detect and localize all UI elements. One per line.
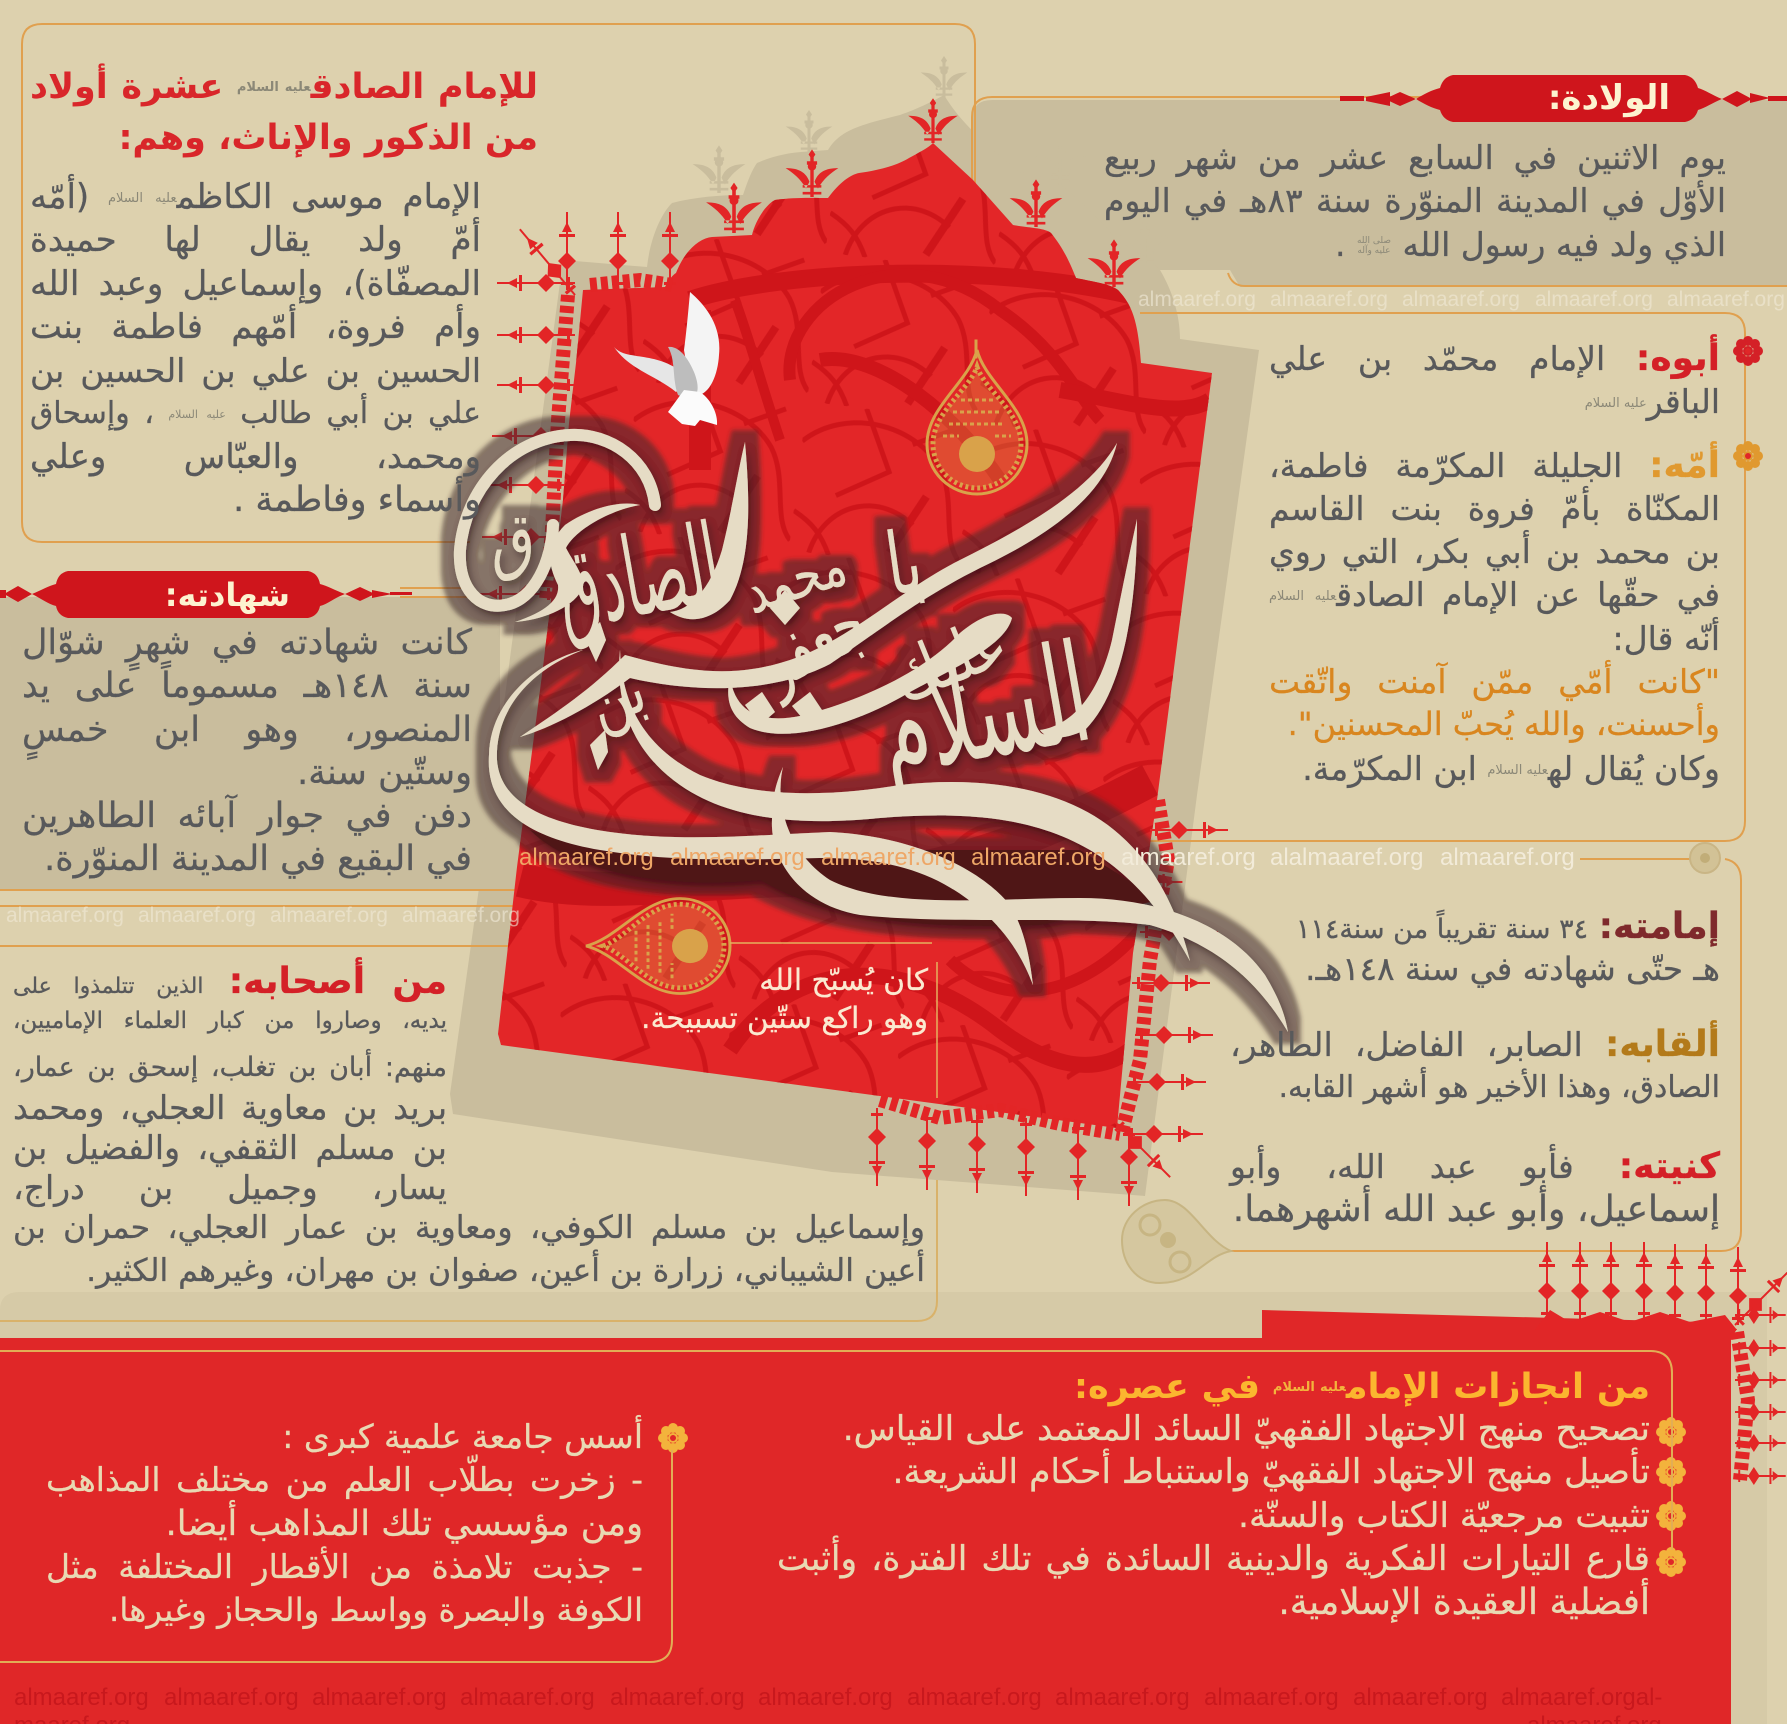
text: imamate, titles, kunya: إسماعيل، وأبو عبد الله أشهرهما. bbox=[1233, 1189, 1720, 1230]
icon: small pale drop bbox=[1690, 843, 1720, 873]
text: martyrdom: وستّين سنة. bbox=[297, 753, 472, 793]
watermark: upper row: almaaref.org bbox=[1667, 288, 1785, 311]
watermark: middle row: almaaref.org bbox=[821, 844, 956, 871]
text: children list: الحسين بن علي بن الحسين بن bbox=[30, 351, 481, 390]
text: parents: في حقّها عن الإمام الصادقعليه السلام bbox=[1269, 575, 1720, 614]
text: martyrdom bbox=[22, 623, 472, 879]
text: scholarly university: ومن مؤسسي تلك المذاهب أيضا. bbox=[166, 1504, 643, 1544]
text: parents: الباقرعليه السلام bbox=[1585, 382, 1720, 421]
watermark: upper row: almaaref.org bbox=[402, 904, 520, 927]
text: companions: بريد بن معاوية العجلي، ومحمد bbox=[13, 1088, 447, 1127]
heading: achievements: من انجازات الإمامعليه السلام في عصره: bbox=[1074, 1367, 1650, 1407]
text: companions continued: أعين الشيباني، زرارة بن أعين، صفوان بن مهران، وغيرهم الكثير. bbox=[86, 1253, 925, 1289]
text: children list: الإمام موسى الكاظمعليه السلام (أمّه bbox=[30, 177, 481, 217]
text: companions continued: وإسماعيل بن مسلم الكوفي، ومعاوية بن عمار العجلي، حمران بن bbox=[13, 1210, 925, 1246]
text: children list: المصفّاة)، وإسماعيل وعبد الله bbox=[30, 264, 481, 304]
text: parents: أنّه قال: bbox=[1613, 619, 1720, 658]
text: achievements list: تأصيل منهج الاجتهاد الفقهيّ واستنباط أحكام الشريعة. bbox=[892, 1452, 1650, 1492]
text: imamate, titles, kunya: إمامته: ٣٤ سنة تقريباً من سنة١١٤ bbox=[1296, 906, 1720, 947]
text: parents: بن محمد بن أبي بكر، التي روي bbox=[1269, 532, 1720, 571]
text: companions: من أصحابه: الذين تتلمذوا على bbox=[13, 961, 447, 1002]
text: scholarly university: الكوفة والبصرة وواسط والحجاز وغيرها. bbox=[109, 1591, 643, 1629]
watermark: middle row: alalmaaref.org bbox=[1270, 844, 1423, 871]
watermark: bottom row: almaaref.org bbox=[1204, 1684, 1339, 1711]
watermark: middle row: almaaref.org bbox=[1121, 844, 1256, 871]
heading: ten children: للإمام الصادقعليه السلام عشرة أولاد bbox=[30, 67, 538, 107]
watermark: upper row: almaaref.org bbox=[1535, 288, 1653, 311]
text: martyrdom: المنصور، وهو ابن خمسٍ bbox=[22, 710, 472, 750]
text: parents: وأحسنت، والله يُحبّ المحسنين". bbox=[1288, 705, 1720, 743]
caption rules bbox=[730, 943, 937, 1098]
calligraphy: greeting to Imam al-Sadiq bbox=[460, 435, 1288, 1032]
text: scholarly university bbox=[46, 1414, 643, 1630]
icon: gold drop in red field bbox=[586, 898, 730, 994]
text: martyrdom: سنة ١٤٨هـ مسموماً على يد bbox=[22, 666, 472, 706]
banner: birth bbox=[1340, 75, 1787, 122]
text: birth: صلى الله عليه وآله bbox=[1357, 236, 1391, 256]
text: companions: يسار، وجميل بن دراج، bbox=[13, 1168, 447, 1207]
watermark: upper row: almaaref.org bbox=[138, 904, 256, 927]
text: children list: علي بن أبي طالب عليه السلام ، وإسحاق bbox=[30, 396, 481, 431]
caption: tasbih: كان يُسبّح الله bbox=[759, 963, 928, 997]
watermark: middle row: almaaref.org bbox=[519, 844, 654, 871]
text: martyrdom: دفن في جوار آبائه الطاهرين bbox=[22, 796, 472, 836]
text: scholarly university: - زخرت بطلّاب العلم من مختلف المذاهب bbox=[46, 1460, 643, 1499]
watermark: bottom row: almaaref.org bbox=[610, 1684, 745, 1711]
watermark: bottom row: almaaref.org bbox=[312, 1684, 447, 1711]
orange panel outlines bbox=[0, 24, 1787, 1321]
text: companions continued bbox=[13, 1210, 925, 1289]
text: parents: المكنّاة بأمّ فروة بنت القاسم bbox=[1269, 489, 1720, 528]
icon: pale drop beside panel bbox=[1122, 1200, 1231, 1283]
text: achievements list: تثبيت مرجعيّة الكتاب والسنّة. bbox=[1238, 1496, 1650, 1536]
heading: ten children: من الذكور والإناث، وهم: bbox=[118, 118, 538, 158]
watermark: middle row: almaaref.org bbox=[971, 844, 1106, 871]
text: children list: أمّ ولد يقال لها حميدة bbox=[30, 220, 481, 260]
watermark: middle row: almaaref.org bbox=[670, 844, 805, 871]
text: imamate, titles, kunya: كنيته: فأبو عبد الله، وأبو bbox=[1230, 1146, 1720, 1187]
watermark: bottom row: almaaref.org bbox=[758, 1684, 893, 1711]
text: achievements list: تصحيح منهج الاجتهاد الفقهيّ السائد المعتمد على القياس. bbox=[843, 1409, 1650, 1449]
text: scholarly university: - جذبت تلامذة من الأقطار المختلفة مثل bbox=[46, 1547, 643, 1586]
watermark: bottom row: almaaref.org bbox=[460, 1684, 595, 1711]
real words: ق bbox=[492, 496, 535, 583]
text: companions: يديه، وصاروا من كبار العلماء الإماميين، bbox=[13, 1008, 447, 1034]
icon: dove bbox=[614, 292, 719, 426]
watermark: bottom row: almaaref.orgal- bbox=[1501, 1684, 1662, 1711]
heading: birth banner: الولادة: bbox=[1548, 78, 1670, 118]
watermark: upper row: almaaref.org bbox=[6, 904, 124, 927]
watermark: upper row: almaaref.org bbox=[1270, 288, 1388, 311]
text: parents bbox=[1269, 334, 1720, 788]
gold rules in the red band bbox=[0, 1351, 1672, 1662]
text: children list: ومحمد، والعبّاس وعلي bbox=[30, 437, 481, 477]
bottom tan band bbox=[0, 1292, 1767, 1724]
text: companions bbox=[13, 957, 447, 1208]
real words: الصادق bbox=[546, 499, 730, 655]
text: achievements list bbox=[777, 1409, 1650, 1623]
text: martyrdom: كانت شهادته في شهرٍ شوّال bbox=[22, 623, 472, 663]
text: scholarly university: أسس جامعة علمية كبرى : bbox=[282, 1417, 643, 1456]
banner: martyrdom bbox=[0, 571, 412, 618]
heading: ten children bbox=[30, 63, 538, 158]
real words: السلام bbox=[867, 615, 1101, 807]
text: achievements list: قارع التيارات الفكرية والدينية السائدة في تلك الفترة، وأثبت bbox=[777, 1539, 1650, 1579]
text: parents: أمّه: الجليلة المكرّمة فاطمة، bbox=[1269, 445, 1720, 486]
real words: بن bbox=[577, 649, 656, 743]
real words bbox=[492, 496, 1101, 807]
text: birth bbox=[1104, 138, 1726, 264]
mihrab shadow bbox=[450, 56, 1259, 1196]
caption: tasbih: وهو راكع ستّين تسبيحة. bbox=[641, 1001, 928, 1035]
text: companions: منهم: أبان بن تغلب، إسحق بن عمار، bbox=[13, 1052, 447, 1083]
panel fill: birth bbox=[972, 100, 1787, 287]
text: parents: أبوه: الإمام محمّد بن علي bbox=[1269, 338, 1720, 379]
real words: يا bbox=[880, 513, 928, 616]
text: birth: الأوّل في المدينة المنوّرة سنة ٨٣هـ في اليوم bbox=[1104, 181, 1726, 220]
watermark: bottom row: almaaref.org bbox=[14, 1684, 149, 1711]
text: children list: وأم فروة، أمّهم فاطمة بنت bbox=[30, 307, 481, 347]
watermark: bottom row: almaaref.org bbox=[1055, 1684, 1190, 1711]
text: parents: وكان يُقال لهعليه السلام ابن المكرّمة. bbox=[1302, 749, 1720, 788]
watermark: bottom row: almaaref.org bbox=[164, 1684, 299, 1711]
text: children list bbox=[30, 174, 481, 520]
watermark: upper row: almaaref.org bbox=[1138, 288, 1256, 311]
text: companions: بن مسلم الثقفي، والفضيل بن bbox=[13, 1128, 447, 1167]
flourish strokes bbox=[489, 650, 1033, 985]
watermark: upper row: almaaref.org bbox=[270, 904, 388, 927]
watermark: upper row: almaaref.org bbox=[1402, 288, 1520, 311]
text: birth: الذي ولد فيه رسول الله . bbox=[1335, 225, 1726, 264]
panel fill: martyrdom bbox=[0, 597, 500, 890]
flower icons bbox=[658, 336, 1763, 1577]
text: achievements list: أفضلية العقيدة الإسلامية. bbox=[1278, 1582, 1650, 1623]
text: parents: "كانت أمّي ممّن آمنت واتّقت bbox=[1269, 662, 1720, 701]
text: imamate, titles, kunya: الصادق، وهذا الأخير هو أشهر القابه. bbox=[1278, 1070, 1720, 1105]
dark band under the ribbons bbox=[530, 830, 1160, 926]
icon: hanging gold drop bbox=[927, 340, 1027, 494]
watermark: bottom row: almaaref.org bbox=[907, 1684, 1042, 1711]
text: birth: يوم الاثنين في السابع عشر من شهر ربيع bbox=[1104, 138, 1726, 177]
red ornaments around the mihrab bbox=[477, 98, 1787, 1485]
text: imamate, titles, kunya bbox=[1228, 906, 1720, 1230]
heading: martyrdom banner: شهادته: bbox=[165, 576, 290, 614]
text: imamate, titles, kunya: هـ حتّى شهادته في سنة ١٤٨هـ. bbox=[1305, 950, 1720, 988]
real words: جعفر bbox=[741, 579, 881, 709]
real words: عليك bbox=[880, 600, 1018, 719]
real words: محمد bbox=[735, 529, 855, 628]
text: martyrdom: في البقيع في المدينة المنوّرة. bbox=[44, 839, 472, 879]
text: imamate, titles, kunya: ألقابه: الصابر، الفاضل، الطاهر، bbox=[1230, 1024, 1720, 1065]
text: children list: وأسماء وفاطمة . bbox=[233, 480, 481, 520]
watermark: middle row: almaaref.org bbox=[1440, 844, 1575, 871]
watermark: bottom row: almaaref.org bbox=[1353, 1684, 1488, 1711]
caption: tasbih bbox=[641, 963, 928, 1036]
